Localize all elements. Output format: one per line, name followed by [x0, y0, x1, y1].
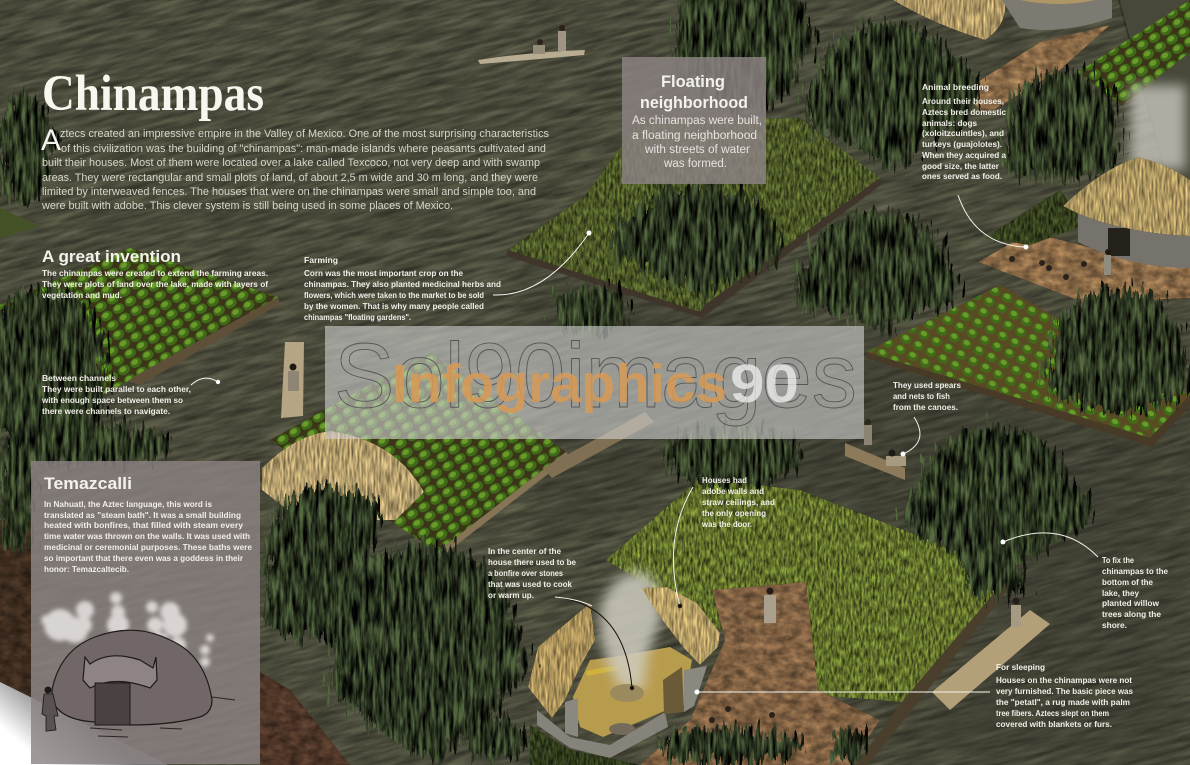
plot: right crops — [866, 285, 1190, 447]
canoe: fishers — [845, 419, 906, 480]
hut door — [95, 683, 130, 725]
panel: floating neighborhood: was formed. — [663, 158, 727, 170]
leader: willow trees — [1000, 533, 1098, 557]
floor — [573, 647, 692, 737]
plot: top right crops — [1078, 0, 1190, 106]
section: spears and nets: from the canoes. — [893, 402, 958, 412]
section: animal breeding: When they acquired a — [922, 150, 1006, 160]
section: a great invention — [42, 247, 268, 300]
person beside hut — [42, 686, 58, 731]
section: a great invention: vegetation and mud. — [42, 290, 122, 300]
leader: bonfire — [555, 597, 634, 690]
panel: floating neighborhood — [622, 57, 766, 184]
section: a great invention: A great invention — [42, 247, 181, 266]
watermark: 90 — [730, 354, 799, 414]
panel: temazcalli: time water was thrown on the walls. It was used with — [44, 531, 250, 541]
plot: green strip beneath yard — [985, 190, 1085, 245]
plot: lower grass field — [606, 478, 1018, 765]
plot: upper right dirt yard — [978, 232, 1190, 303]
section: houses had adobe walls: Houses had — [702, 475, 747, 485]
section: animal breeding: (xoloitzcuintles), and — [922, 128, 1004, 138]
section: bonfire: house there used to be — [488, 557, 576, 567]
white page curl corner — [0, 682, 168, 765]
section: houses had adobe walls: the only opening — [702, 508, 766, 518]
front wall — [537, 710, 668, 758]
panel: floating neighborhood: neighborhood — [640, 93, 748, 112]
section: for sleeping: very furnished. The basic piece was — [996, 686, 1133, 696]
title: Chinampas — [42, 66, 264, 122]
plot: upper left crops — [0, 248, 280, 410]
section: willow trees — [1102, 555, 1168, 630]
house: right yard with smoke — [1063, 85, 1190, 268]
canoe: left channel — [281, 342, 304, 418]
panel: floating neighborhood: with streets of water — [644, 144, 750, 156]
bonfire ring — [610, 684, 644, 702]
figure on dirt path — [764, 588, 776, 623]
house: top centre — [893, 0, 1005, 40]
smoke — [599, 572, 662, 690]
section: animal breeding: turkeys (guajolotes). — [922, 139, 1002, 149]
panel: floating neighborhood: As chinampas were built, — [632, 115, 762, 127]
willow trees: back layer — [0, 0, 1190, 595]
right thatch roof — [642, 587, 720, 665]
canoe: centre — [543, 412, 654, 478]
intro paragraph: limited by interweaved fences. The houses that were on the chinampas were small and simple too, and — [42, 186, 536, 198]
section: farming: by the women. That is why many people called — [304, 301, 484, 311]
section: animal breeding — [922, 82, 1006, 181]
section: between channels: there were channels to navigate. — [42, 406, 170, 416]
watermark: Sol90images — [334, 325, 857, 427]
section: willow trees: lake, they — [1102, 588, 1139, 598]
house: cutaway with bonfire — [528, 572, 720, 758]
section: bonfire: a bonfire over stones — [488, 568, 563, 578]
section: for sleeping: Houses on the chinampas were not — [996, 675, 1132, 685]
section: animal breeding: Aztecs bred domestic — [922, 107, 1006, 117]
plot: upper grass field — [506, 118, 882, 318]
section: for sleeping: the "petatl", a rug made with palm — [996, 697, 1130, 707]
section: farming: Farming — [304, 255, 338, 265]
panel: temazcalli: medicinal or ceremonial purposes. These baths were — [44, 542, 252, 552]
intro paragraph: ztecs created an impressive empire in the Valley of Mexico. One of the most surprising characteristics — [60, 128, 549, 140]
watermark: Infographics — [392, 354, 727, 414]
section: farming: chinampas. They also planted medicinal herbs and — [304, 279, 501, 289]
section: a great invention: They were plots of land over the lake, made with layers of — [42, 279, 268, 289]
grass in front of cutaway house — [530, 725, 640, 765]
panel: temazcalli: Temazcalli — [44, 474, 132, 493]
leader: spears and nets — [900, 417, 920, 456]
panel: temazcalli: In Nahuatl, the Aztec language, this word is — [44, 499, 212, 509]
panel: floating neighborhood: Floating — [661, 72, 725, 91]
section: between channels — [41, 373, 191, 416]
panel: temazcalli: heated with bonfires, that filled with steam every — [44, 520, 243, 530]
section: spears and nets — [893, 380, 961, 412]
section: houses had adobe walls: was the door. — [701, 519, 752, 529]
leader: adobe walls — [673, 487, 693, 608]
section: willow trees: shore. — [1102, 620, 1127, 630]
panel: temazcalli: translated as "steam bath". It was a small building — [44, 510, 241, 520]
section: animal breeding: good size, the latter — [922, 161, 1000, 171]
section: for sleeping: tree fibers. Aztecs slept on them — [996, 708, 1109, 718]
section: a great invention: The chinampas were created to extend the farming areas. — [42, 268, 268, 278]
hut body — [52, 630, 212, 725]
intro paragraph: built their houses. Most of them were located over a lake called Texcoco, not very deep and with swamp — [42, 157, 540, 169]
section: animal breeding: Animal breeding — [922, 82, 989, 92]
house: top right — [1002, 0, 1112, 30]
illustration: temazcal hut with steam — [41, 592, 235, 737]
section: houses had adobe walls: straw ceilings, and — [702, 497, 775, 507]
section: willow trees: planted willow — [1102, 598, 1159, 608]
plot: centre crops — [270, 352, 570, 557]
intro paragraph: areas. They were rectangular and small plots of land, of about 2,5 m wide and 30 m long, and they were — [42, 172, 538, 184]
section: for sleeping — [996, 662, 1133, 729]
canoe: lower right with figure — [932, 598, 1050, 710]
section: farming: flowers, which were taken to the market to be sold — [304, 290, 484, 300]
house: centre left — [262, 431, 424, 520]
section: spears and nets: They used spears — [893, 380, 961, 390]
turkeys near cutaway house — [709, 706, 775, 723]
plot: brown earth at left edge — [0, 520, 31, 700]
plot: brown earth at bottom left — [260, 672, 350, 765]
panel: temazcalli — [31, 461, 260, 764]
panel: temazcalli: honor: Temazcaltecib. — [44, 564, 129, 574]
section: willow trees: trees along the — [1102, 609, 1161, 619]
pots — [609, 723, 635, 735]
section: willow trees: chinampas to the — [1102, 566, 1168, 576]
section: animal breeding: Around their houses, — [922, 96, 1004, 106]
section: willow trees: To fix the — [1102, 555, 1134, 565]
section: farming: Corn was the most important crop on the — [304, 268, 463, 278]
wall post left — [565, 698, 578, 737]
beam on floor — [586, 665, 618, 676]
houses with thatched roofs — [262, 0, 1190, 765]
section: animal breeding: animals: dogs — [922, 118, 977, 128]
intro paragraph: of this civilization was the building of "chinampas": man-made islands where peasants cultivated and — [61, 143, 546, 155]
plot: top right dirt path — [962, 25, 1110, 115]
turkeys in right yard — [1009, 256, 1087, 280]
figure near right house — [1104, 249, 1111, 275]
section: farming: chinampas "floating gardens". — [304, 312, 411, 322]
wall post right — [663, 667, 684, 714]
intro paragraph: A — [41, 124, 61, 157]
canoe: top — [478, 25, 585, 64]
leader: farming — [493, 230, 592, 295]
plot: far left small shore — [0, 208, 40, 238]
intro paragraph — [41, 124, 549, 212]
section: bonfire: or warm up. — [488, 590, 534, 600]
section: willow trees: bottom of the — [1102, 577, 1153, 587]
section: between channels: with enough space between them so — [41, 395, 183, 405]
leader: animal breeding — [958, 195, 1028, 250]
leader: between channels — [191, 378, 220, 385]
panel: floating neighborhood: a floating neighborhood — [632, 130, 757, 142]
section: houses had adobe walls — [701, 475, 775, 529]
canoes — [281, 25, 1050, 710]
section: spears and nets: and nets to fish — [893, 391, 950, 401]
section: farming — [304, 255, 501, 322]
steam puffs — [41, 592, 214, 667]
panel: temazcalli: so important that there even was a goddess in their — [44, 553, 244, 563]
section: for sleeping: For sleeping — [996, 662, 1045, 672]
willow trees: front layer — [261, 487, 866, 763]
section: bonfire — [488, 546, 576, 600]
ground lines — [90, 697, 235, 737]
intro paragraph: were built with adobe. This clever system is still being used in some places of Mexico. — [41, 200, 453, 212]
side wall — [684, 666, 707, 712]
section: between channels: They were built parallel to each other, — [42, 384, 191, 394]
leader: for sleeping — [694, 690, 990, 694]
section: houses had adobe walls: adobe walls and — [702, 486, 764, 496]
section: bonfire: In the center of the — [488, 546, 561, 556]
left thatch roof — [528, 603, 595, 718]
hut roof band — [83, 656, 157, 688]
section: animal breeding: ones served as food. — [922, 171, 1002, 181]
section: bonfire: that was used to cook — [488, 579, 572, 589]
section: for sleeping: covered with blankets or furs. — [996, 719, 1112, 729]
section: between channels: Between channels — [42, 373, 116, 383]
